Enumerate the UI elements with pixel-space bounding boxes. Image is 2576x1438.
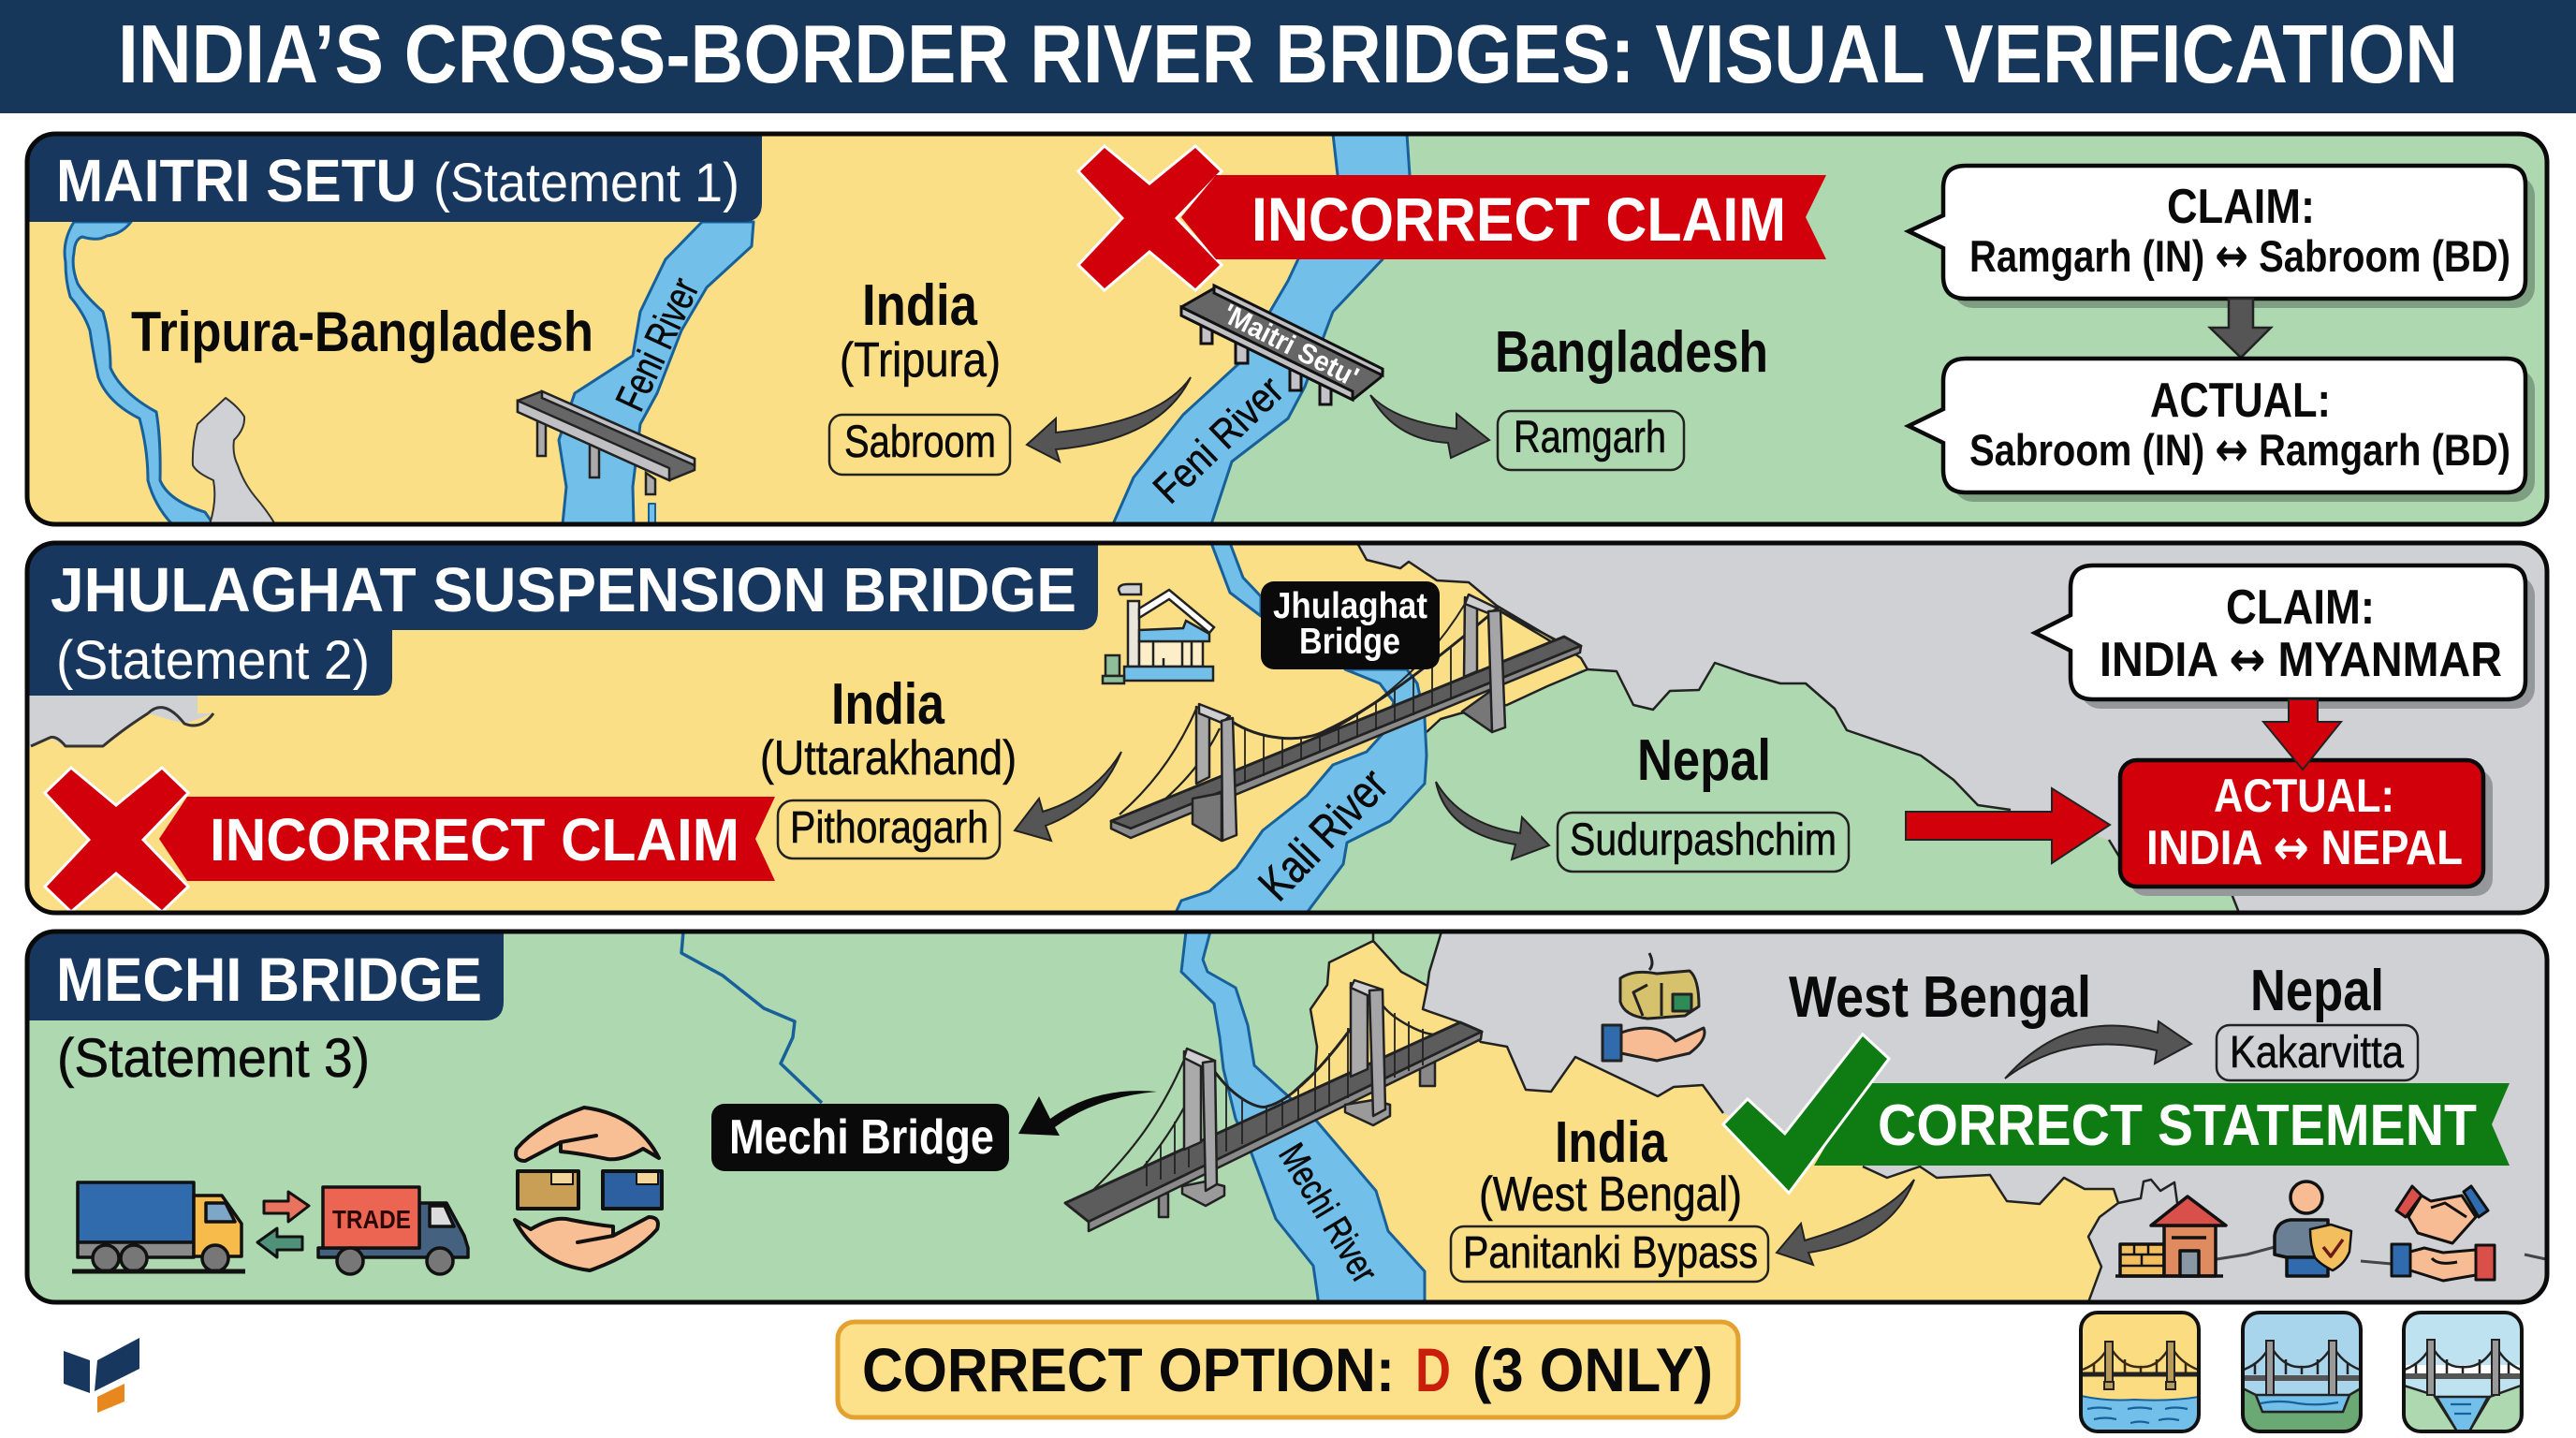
label: India (Uttarakhand) <box>760 672 1017 785</box>
bridge label: Jhulaghat Bridge: Bridge <box>1299 622 1400 662</box>
bridge label: Jhulaghat Bridge: Jhulaghat <box>1273 586 1427 626</box>
river label: Feni River lower: Feni River <box>1145 367 1293 512</box>
panel: Maitri Setu <box>27 134 2547 524</box>
answer box: correct option: (3 ONLY) <box>1472 1335 1713 1404</box>
icon: blue truck <box>72 1182 245 1271</box>
heading tab: (Statement 2) <box>56 630 370 691</box>
callout: actual <box>1909 359 2535 502</box>
place tag: Sudurpashchim: Sudurpashchim <box>1570 815 1837 865</box>
icon: hand holding map <box>1603 953 1705 1061</box>
answer box: correct option: CORRECT OPTION: <box>862 1335 1395 1404</box>
icon: border house and crates <box>2115 1196 2226 1276</box>
callout: claim <box>1909 166 2535 308</box>
small bridge <box>518 391 695 494</box>
place tag: Pithoragarh: Pithoragarh <box>790 803 988 853</box>
heading tab: JHULAGHAT SUSPENSION BRIDGE <box>51 555 1076 625</box>
callout: actual: ACTUAL: <box>2214 770 2394 822</box>
arrow: to Kakarvitta <box>2005 1021 2191 1078</box>
icon: handshake <box>2396 1186 2488 1243</box>
banner: correct statement <box>1814 1083 2510 1166</box>
label: Nepal: Nepal <box>2250 959 2384 1023</box>
label: India (West Bengal): India <box>1555 1110 1667 1175</box>
arrow: to Mechi Bridge label <box>1018 1091 1157 1136</box>
answer box: correct option <box>838 1322 1738 1417</box>
thumbnail: bridge over gorge <box>2404 1313 2522 1431</box>
callout: claim: Ramgarh (IN) ↔ Sabroom (BD) <box>1969 228 2510 283</box>
map: West Bengal and Nepal <box>27 932 2547 1302</box>
label: India (West Bengal): (West Bengal) <box>1479 1167 1742 1222</box>
answer box: correct option: D <box>1415 1335 1451 1404</box>
heading tab <box>27 543 1098 696</box>
icon: red trade truck: TRADE <box>332 1205 411 1234</box>
label: India (West Bengal) <box>1479 1110 1742 1222</box>
bridge label: Jhulaghat Bridge <box>1261 581 1440 669</box>
verdict: green check <box>1725 1036 1887 1191</box>
arrow: claim to actual <box>2210 299 2271 358</box>
bridge label: Mechi Bridge: Mechi Bridge <box>729 1110 994 1165</box>
banner: incorrect claim: INCORRECT CLAIM <box>210 806 739 873</box>
Mechi suspension bridge <box>1065 980 1482 1231</box>
icon: trade arrows <box>257 1192 309 1257</box>
arrow: red horizontal to actual <box>1906 788 2110 863</box>
place tag: Panitanki Bypass: Panitanki Bypass <box>1463 1228 1758 1278</box>
region label: Tripura-Bangladesh: Tripura-Bangladesh <box>131 301 593 363</box>
verdict: red X <box>47 770 186 910</box>
arrow: to Sabroom <box>1027 377 1191 462</box>
label: India (Tripura) <box>840 273 1001 388</box>
banner: correct statement: CORRECT STATEMENT <box>1878 1093 2477 1158</box>
map: Tripura and Bangladesh <box>27 134 2547 524</box>
callout: actual <box>2120 760 2493 896</box>
label: West Bengal: West Bengal <box>1789 965 2091 1030</box>
callout: actual: ACTUAL: <box>2150 374 2331 428</box>
icon: riverside house <box>1103 584 1214 683</box>
callout: claim: INDIA ↔ MYANMAR <box>2100 632 2502 688</box>
subheading: Statement 3: (Statement 3) <box>57 1028 370 1089</box>
label: India (Tripura): India <box>862 273 977 338</box>
label: Nepal: Nepal <box>1637 728 1771 793</box>
verdict: red X <box>1080 148 1220 288</box>
label: India (Uttarakhand): India <box>831 672 944 737</box>
icon: open hands <box>2392 1244 2495 1281</box>
place tag: Kakarvitta: Kakarvitta <box>2230 1028 2404 1078</box>
arrow: to Ramgarh <box>1370 395 1489 458</box>
callout: claim: CLAIM: <box>2226 580 2375 635</box>
icon: red trade truck <box>318 1187 468 1274</box>
callout: actual: Sabroom (IN) ↔ Ramgarh (BD) <box>1969 422 2510 477</box>
callout: claim: CLAIM: <box>2167 180 2315 234</box>
thumbnail: bridge over river plain <box>2081 1313 2199 1431</box>
callout: claim <box>2035 565 2535 709</box>
panel: Jhulaghat Suspension Bridge <box>27 543 2547 913</box>
place tag: Sabroom: Sabroom <box>844 418 996 467</box>
thumbnail: bridge over green banks <box>2243 1313 2361 1431</box>
arrow: claim to actual <box>2263 699 2341 770</box>
heading tab: (Statement 1) <box>433 153 739 213</box>
icon: hands exchanging goods <box>515 1108 662 1270</box>
map: Uttarakhand, Nepal and neighbours <box>27 543 2547 913</box>
banner: incorrect claim: INCORRECT CLAIM <box>1251 184 1786 254</box>
label: Bangladesh: Bangladesh <box>1495 320 1768 385</box>
heading tab: MAITRI SETU <box>56 147 417 214</box>
arrow: to Panitanki Bypass <box>1777 1180 1914 1265</box>
place tag: Ramgarh: Ramgarh <box>1514 413 1666 462</box>
label: India (Tripura): (Tripura) <box>840 333 1001 388</box>
Jhulaghat suspension bridge <box>1111 594 1581 841</box>
Maitri Setu bridge: 'Maitri Setu' <box>1218 299 1364 393</box>
heading tab <box>27 134 762 222</box>
river label: Feni River upper: Feni River <box>607 271 708 418</box>
arrow: to Pithoragarh <box>1015 752 1121 841</box>
arrow: to Sudurpashchim <box>1436 782 1549 859</box>
river label: Mechi River: Mechi River <box>1270 1137 1385 1290</box>
callout: actual: INDIA ↔ NEPAL <box>2146 820 2463 876</box>
heading tab: MECHI BRIDGE <box>56 945 482 1014</box>
panel: Mechi Bridge <box>27 932 2547 1302</box>
river label: Kali River: Kali River <box>1249 758 1398 911</box>
logo <box>64 1338 139 1413</box>
icon: officer with shield <box>2275 1181 2351 1276</box>
label: India (Uttarakhand): (Uttarakhand) <box>760 731 1017 785</box>
Maitri Setu bridge <box>1181 286 1383 404</box>
